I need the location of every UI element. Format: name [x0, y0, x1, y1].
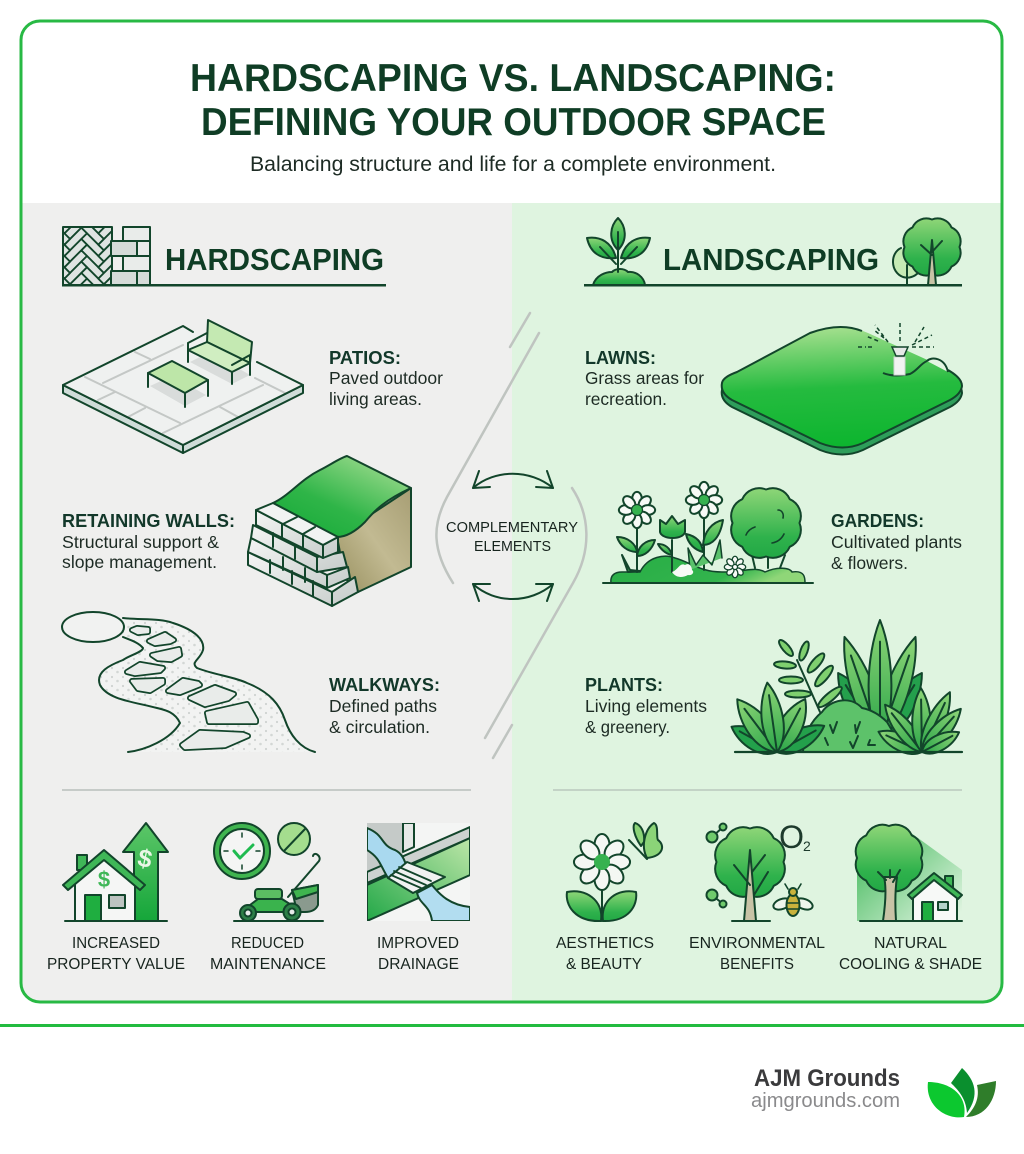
label: patios: PATIOS:	[329, 347, 401, 368]
label: plants	[585, 674, 707, 737]
label: patios	[329, 347, 443, 409]
benefit: improved drainage: DRAINAGE	[378, 956, 459, 973]
footer rule	[0, 1024, 1024, 1027]
logo: three leaves	[928, 1068, 996, 1117]
title: HARDSCAPING VS. LANDSCAPING:	[190, 57, 836, 100]
label: walkways: & circulation.	[329, 717, 430, 737]
benefit: natural cooling and shade: NATURAL	[874, 935, 947, 952]
icon: sprout	[587, 218, 650, 285]
label: walkways	[329, 674, 440, 737]
label: walkways: Defined paths	[329, 696, 437, 716]
benefit: environmental benefits: BENEFITS	[720, 956, 794, 973]
center: curved dividers	[436, 313, 586, 758]
title: DEFINING YOUR OUTDOOR SPACE	[201, 101, 826, 144]
arrow: bottom two-way	[473, 584, 553, 601]
label: retaining walls: RETAINING WALLS:	[62, 510, 235, 531]
benefit: increased property value: INCREASED	[72, 935, 160, 952]
label: retaining walls	[62, 510, 235, 572]
icon: tree, oxygen and bee	[706, 824, 814, 921]
benefit: environmental benefits: 2	[803, 838, 811, 854]
benefit: improved drainage: IMPROVED	[377, 935, 459, 952]
heading: landscaping	[584, 218, 962, 286]
benefit: reduced maintenance	[210, 823, 326, 973]
icon: retaining wall	[248, 456, 411, 606]
benefit: environmental benefits: ENVIRONMENTAL	[689, 935, 825, 952]
icon: plants	[727, 620, 967, 761]
label: plants: Living elements	[585, 696, 707, 716]
center: complementary elements label: ELEMENTS	[474, 539, 551, 555]
benefit: improved drainage	[367, 823, 470, 973]
label: gardens: GARDENS:	[831, 510, 924, 531]
footer brand text	[751, 1065, 900, 1112]
divider: left	[62, 789, 471, 791]
benefit: aesthetics and beauty: & BEAUTY	[566, 956, 642, 973]
divider: right	[553, 789, 962, 791]
icon: clock, no sign and mower	[214, 823, 323, 921]
label: lawns: Grass areas for	[585, 368, 704, 388]
icon: herringbone pavers and bricks	[62, 226, 151, 284]
title	[190, 57, 836, 144]
benefit: reduced maintenance: REDUCED	[231, 935, 304, 952]
benefit: environmental benefits	[689, 819, 825, 973]
label: plants: PLANTS:	[585, 674, 663, 695]
heading: hardscaping: HARDSCAPING	[165, 242, 384, 277]
label: gardens: & flowers.	[831, 553, 908, 573]
arrow: top two-way	[473, 471, 553, 488]
center: complementary elements label: COMPLEMENTARY	[446, 520, 578, 536]
icon: drainage grate	[367, 823, 470, 921]
benefit: increased property value	[47, 823, 185, 973]
benefit: natural cooling and shade: COOLING & SHADE	[839, 956, 982, 973]
footer brand text: ajmgrounds.com	[751, 1090, 900, 1112]
benefit: aesthetics and beauty	[556, 823, 662, 973]
panel: right landscaping background	[512, 203, 1003, 1003]
label: retaining walls: Structural support &	[62, 532, 219, 552]
label: gardens	[831, 510, 962, 573]
label: lawns	[585, 347, 704, 409]
benefit: increased property value: PROPERTY VALUE	[47, 956, 185, 973]
icon: patio	[63, 320, 303, 453]
label: walkways: WALKWAYS:	[329, 674, 440, 695]
heading: hardscaping	[62, 226, 386, 286]
icon: house with rising arrow: $	[98, 867, 110, 892]
label: gardens: Cultivated plants	[831, 532, 962, 552]
icon: flower and butterfly	[567, 823, 662, 921]
subtitle: Balancing structure and life for a complete environment.	[250, 153, 776, 176]
label: patios: living areas.	[329, 389, 422, 409]
icon: tree shading house	[856, 825, 962, 921]
label: lawns: LAWNS:	[585, 347, 656, 368]
label: patios: Paved outdoor	[329, 368, 443, 388]
icon: walkway	[62, 612, 315, 752]
panel: left hardscaping background	[21, 203, 512, 1003]
benefit: reduced maintenance: MAINTENANCE	[210, 956, 326, 973]
heading: landscaping: LANDSCAPING	[663, 242, 879, 277]
benefit: environmental benefits: O	[779, 819, 804, 855]
icon: house with rising arrow	[63, 823, 168, 921]
label: retaining walls: slope management.	[62, 552, 217, 572]
icon: garden	[603, 482, 813, 583]
benefit: aesthetics and beauty: AESTHETICS	[556, 935, 654, 952]
center: complementary elements label	[446, 520, 578, 555]
footer brand text: AJM Grounds	[754, 1065, 900, 1092]
icon: lawn with sprinkler	[722, 323, 962, 454]
icon: house with rising arrow: $	[135, 844, 155, 874]
benefit: natural cooling and shade	[839, 825, 982, 973]
fern	[774, 638, 844, 712]
label: plants: & greenery.	[585, 717, 670, 737]
icon: trees	[893, 218, 961, 285]
label: lawns: recreation.	[585, 389, 667, 409]
